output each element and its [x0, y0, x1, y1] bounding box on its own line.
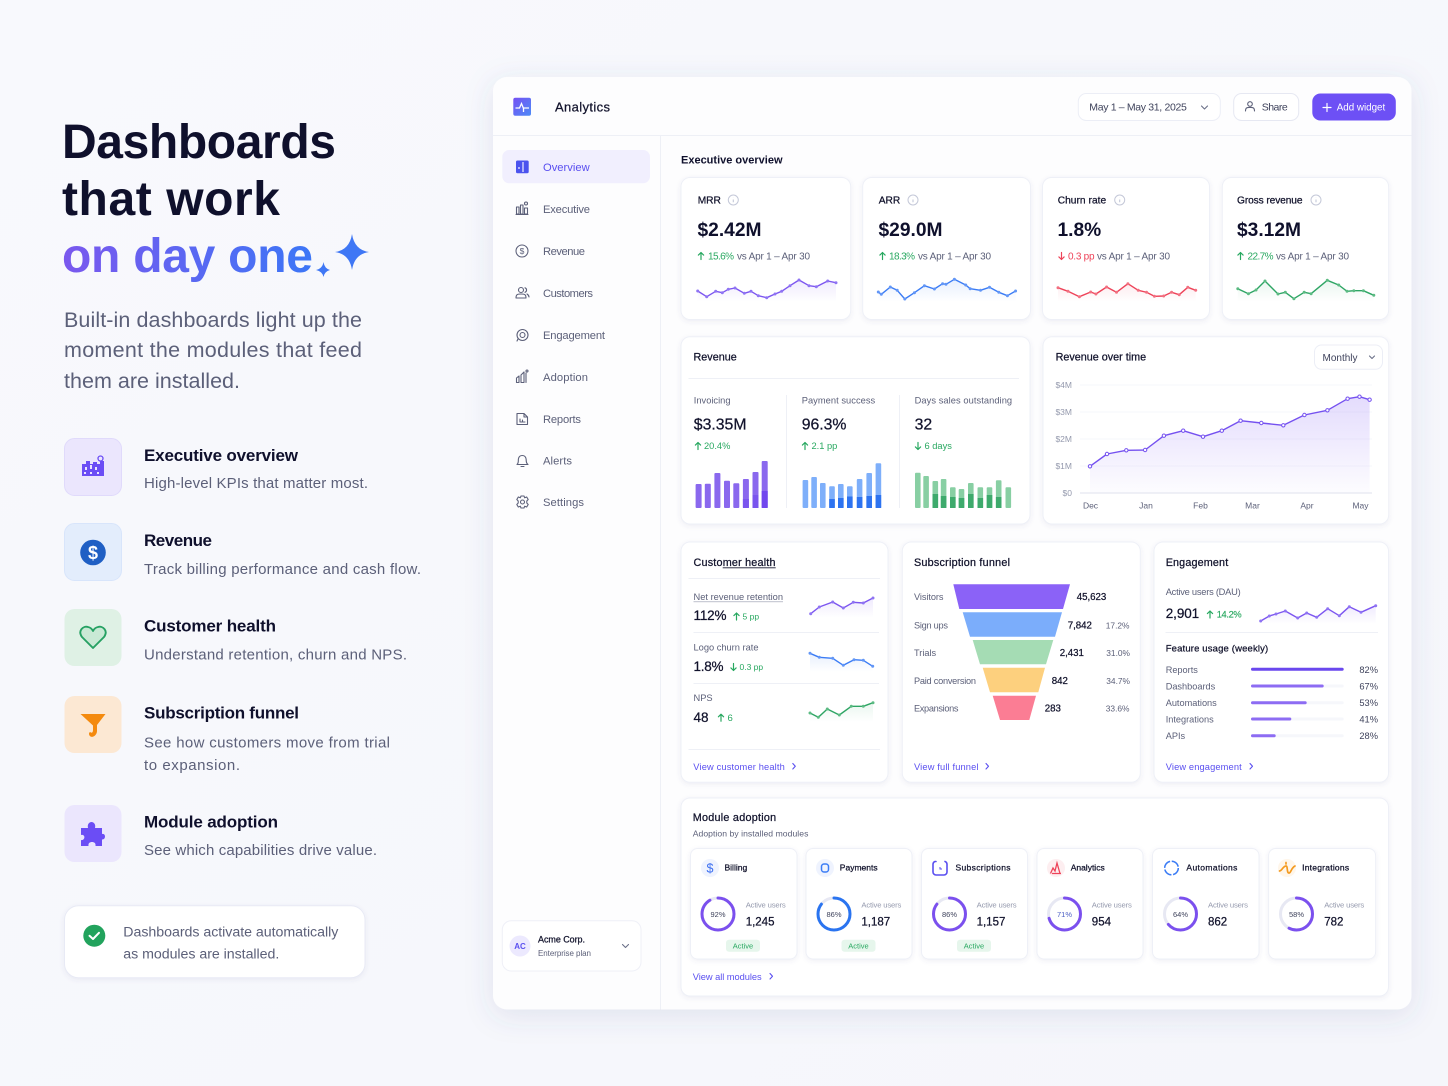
module: subscriptions: Active [964, 942, 984, 950]
metric: payment success: Payment success [802, 396, 876, 406]
account switcher: Acme Corp. [538, 934, 585, 944]
metric: invoicing: $3.35M [694, 416, 747, 433]
date range: May 1 – May 31, 2025 [1089, 102, 1187, 114]
feature usage bars: Integrations [1166, 714, 1214, 724]
KPI card: ARR: $29.0M [878, 220, 942, 241]
KPI card: churn rate: 1.8% [1058, 220, 1101, 241]
metric: payment success: 2.1 pp [812, 441, 837, 451]
funnel labels: Visitors [914, 592, 944, 602]
funnel conversion rates: 17.2% [1106, 620, 1130, 630]
title [62, 116, 336, 283]
link: View engagement [1166, 762, 1242, 772]
module: subscriptions: 86% [942, 910, 957, 919]
top bar [513, 94, 1396, 120]
description: to expansion. [144, 757, 240, 774]
panel: revenue [681, 337, 1030, 524]
module: billing: Billing [724, 863, 747, 873]
heading: Executive overview [144, 446, 299, 465]
link: View customer health [693, 762, 785, 772]
module: billing [690, 848, 797, 959]
description: See how customers move from trial [144, 734, 390, 752]
bar chart [803, 463, 881, 508]
module: integrations: 782 [1324, 917, 1343, 929]
module: subscriptions: Active users [977, 900, 1017, 910]
sparkline [1238, 280, 1374, 302]
nav: engagement [517, 330, 606, 342]
module: analytics [1037, 848, 1143, 959]
bar chart [915, 473, 1011, 508]
metric: NPS: 48 [694, 710, 709, 725]
metric: invoicing: Invoicing [694, 396, 731, 406]
metric: invoicing: 20.4% [704, 441, 730, 451]
feature usage bars: 82% [1359, 665, 1378, 675]
KPI card: MRR: 15.6% [708, 251, 734, 262]
panel: revenue over time: Revenue over time [1056, 352, 1146, 364]
metric: net revenue retention: Net revenue retention [694, 592, 783, 602]
link: View full funnel [914, 762, 978, 772]
share button: Share [1262, 102, 1288, 114]
module: billing: 1,245 [746, 917, 774, 929]
description: High-level KPIs that matter most. [144, 475, 368, 492]
funnel conversion rates: 34.7% [1106, 676, 1131, 686]
icon: check [83, 925, 105, 947]
metric: days sales outstanding: Days sales outstanding [915, 396, 1012, 406]
feature: revenue [64, 524, 421, 580]
sparkline [878, 279, 1016, 302]
icon: heart [64, 609, 122, 666]
panel: customer health [681, 542, 888, 782]
KPI card: gross revenue [1222, 178, 1389, 320]
callout text: as modules are installed. [123, 946, 279, 962]
metric: logo churn rate: 1.8% [694, 659, 724, 674]
area chart: May [1352, 500, 1369, 510]
funnel values: 842 [1052, 676, 1068, 687]
icon: executive overview [64, 438, 122, 496]
title: that work [62, 173, 280, 226]
metric: net revenue retention: 5 pp [742, 612, 759, 622]
area chart: $4M [1055, 380, 1072, 390]
account switcher: AC [514, 942, 526, 951]
module: automations: 64% [1173, 910, 1188, 919]
funnel values [1045, 592, 1106, 715]
KPI card: churn rate: 0.3 pp [1068, 251, 1095, 262]
nav: overview [502, 150, 650, 183]
bar chart [696, 461, 768, 508]
metric: days sales outstanding [915, 396, 1012, 508]
metric: active users: 14.2% [1217, 610, 1242, 620]
description: See which capabilities drive value. [144, 842, 377, 859]
feature usage bars: Dashboards [1166, 682, 1216, 692]
heading: Subscription funnel [144, 704, 299, 722]
module: payments: 86% [826, 910, 842, 919]
KPI card: churn rate: Churn rate [1058, 196, 1107, 206]
funnel values: 283 [1045, 704, 1061, 715]
account switcher [502, 921, 641, 971]
KPI card: gross revenue: vs Apr 1 – Apr 30 [1276, 251, 1349, 262]
callout [64, 906, 365, 978]
nav: customers: Customers [543, 288, 593, 300]
area chart: $3M [1055, 407, 1072, 417]
feature: customer health [64, 609, 407, 666]
funnel values: 45,623 [1077, 592, 1106, 603]
funnel labels [914, 592, 976, 714]
dropdown [1314, 345, 1382, 369]
area chart: $2M [1055, 434, 1072, 444]
area chart: Mar [1245, 500, 1260, 510]
subtitle [64, 308, 362, 393]
callout text: Dashboards activate automatically [123, 925, 339, 941]
account switcher: Enterprise plan [538, 949, 591, 958]
metric: logo churn rate [694, 642, 873, 674]
date range [1078, 94, 1220, 120]
panel: subscription funnel [902, 542, 1140, 782]
module: automations: 862 [1208, 917, 1227, 929]
metric: active users: 2,901 [1166, 606, 1199, 621]
metric: active users [1166, 587, 1376, 624]
sparkline [698, 280, 836, 302]
panel: module adoption [681, 798, 1388, 996]
KPI card: MRR: $2.42M [698, 220, 762, 241]
funnel labels: Sign ups [914, 620, 948, 630]
nav: settings [517, 496, 584, 509]
nav: settings: Settings [543, 497, 584, 509]
feature usage bars: 53% [1359, 698, 1378, 708]
funnel conversion rates [1106, 620, 1131, 714]
icon: revenue [64, 524, 122, 580]
dashboard window [493, 77, 1412, 1010]
module: payments: 1,187 [861, 917, 890, 929]
funnel labels: Trials [914, 648, 937, 658]
metric: payment success [802, 396, 881, 508]
module: subscriptions: 1,157 [977, 917, 1005, 929]
heading: Customer health [144, 616, 276, 636]
module: analytics: 71% [1057, 910, 1072, 919]
area chart [1055, 380, 1372, 510]
metric: days sales outstanding: 32 [915, 416, 932, 433]
metric: net revenue retention: 112% [694, 608, 726, 623]
feature usage bars: Reports [1166, 665, 1198, 675]
module: billing: 92% [710, 910, 726, 919]
metric: payment success: 96.3% [802, 416, 846, 433]
nav: alerts: Alerts [543, 456, 572, 468]
module: subscriptions [922, 848, 1028, 959]
feature: executive overview [64, 438, 368, 496]
feature usage bars: Automations [1166, 698, 1217, 708]
KPI card: MRR: vs Apr 1 – Apr 30 [737, 251, 810, 262]
KPI card: ARR: ARR [879, 196, 900, 206]
panel: subscription funnel: Subscription funnel [914, 557, 1010, 569]
nav: adoption [516, 370, 588, 384]
feature usage bars: 67% [1359, 682, 1378, 692]
panel: revenue over time [1043, 337, 1389, 524]
nav: executive [516, 202, 590, 216]
module: integrations: Integrations [1302, 863, 1349, 873]
metric: active users: Active users (DAU) [1166, 587, 1241, 597]
section heading: Executive overview [681, 154, 783, 166]
nav: overview: Overview [543, 162, 591, 174]
module: integrations: Active users [1324, 900, 1364, 910]
module: analytics: 954 [1092, 917, 1112, 929]
app name: Analytics [555, 100, 610, 115]
module: payments [806, 848, 912, 959]
module: integrations: 58% [1289, 910, 1304, 919]
module: automations: Active users [1208, 900, 1248, 910]
KPI card: ARR: 18.3% [889, 251, 915, 262]
module: automations [1152, 848, 1259, 959]
module: automations: Automations [1186, 863, 1237, 873]
link: View all modules [693, 972, 762, 982]
metric: NPS [694, 693, 873, 725]
area chart: $0 [1063, 488, 1072, 498]
funnel conversion rates: 33.6% [1106, 704, 1130, 714]
module: billing: Active users [746, 900, 786, 910]
nav: customers [516, 288, 593, 300]
KPI card: gross revenue: 22.7% [1248, 251, 1274, 262]
area chart: Jan [1139, 500, 1153, 510]
area chart: $1M [1055, 461, 1072, 471]
panel: engagement: Feature usage (weekly) [1166, 644, 1268, 654]
add widget button: Add widget [1337, 103, 1385, 114]
nav: revenue: $ [520, 246, 525, 256]
description: Track billing performance and cash flow. [144, 561, 421, 578]
title: Dashboards [62, 116, 336, 169]
feature usage bars: 41% [1359, 714, 1378, 724]
KPI card: gross revenue: Gross revenue [1237, 196, 1303, 206]
panel: module adoption: Adoption by installed modules [693, 828, 808, 838]
feature usage bars [1166, 665, 1378, 741]
funnel values: 2,431 [1060, 648, 1084, 659]
module: billing: $ [707, 862, 714, 876]
description: Understand retention, churn and NPS. [144, 646, 407, 663]
area chart: Apr [1300, 500, 1314, 510]
metric: days sales outstanding: 6 days [924, 441, 952, 451]
nav: engagement: Engagement [543, 330, 606, 342]
funnel labels: Paid conversion [914, 676, 976, 686]
icon: funnel [64, 696, 122, 753]
area chart: Dec [1083, 500, 1099, 510]
logo [513, 98, 531, 116]
KPI card: ARR [863, 178, 1030, 320]
subtitle: them are installed. [64, 369, 240, 393]
add widget button [1312, 94, 1396, 120]
panel: revenue: Revenue [694, 352, 737, 364]
KPI card: MRR: MRR [698, 196, 721, 206]
module: analytics: Analytics [1071, 863, 1105, 873]
nav: reports [517, 414, 581, 426]
metric: logo churn rate: Logo churn rate [694, 642, 758, 652]
panel: engagement: Engagement [1166, 557, 1228, 569]
metric: NPS: NPS [694, 693, 713, 703]
title: on day one [62, 230, 313, 283]
panel: module adoption: Module adoption [693, 812, 776, 824]
module: billing: Active [733, 942, 753, 950]
sparkline [1058, 284, 1196, 302]
panel: customer health: Customer health [694, 557, 776, 569]
module: integrations [1269, 848, 1376, 959]
icon: sparkles [316, 234, 369, 277]
KPI card: ARR: vs Apr 1 – Apr 30 [918, 251, 991, 262]
subtitle: Built-in dashboards light up the [64, 308, 362, 332]
nav: adoption: Adoption [543, 372, 588, 384]
icon: puzzle [64, 805, 122, 862]
funnel conversion rates: 31.0% [1106, 648, 1131, 658]
module: payments: Payments [840, 863, 878, 873]
KPI card: gross revenue: $3.12M [1237, 220, 1301, 241]
nav: revenue [516, 245, 585, 258]
KPI card: churn rate: vs Apr 1 – Apr 30 [1097, 251, 1170, 262]
heading: Module adoption [144, 812, 278, 832]
module: analytics: Active users [1092, 900, 1132, 910]
module: payments: Active [848, 942, 869, 950]
panel: engagement [1154, 542, 1388, 782]
module: payments: Active users [861, 900, 902, 910]
feature usage bars: 28% [1359, 731, 1378, 741]
dropdown: Monthly [1322, 353, 1358, 364]
feature: module adoption [64, 805, 377, 862]
nav: reports: Reports [543, 414, 581, 426]
KPI card: churn rate [1042, 178, 1210, 320]
heading: Revenue [144, 531, 212, 550]
share button [1234, 94, 1299, 120]
metric: invoicing [694, 396, 768, 508]
area chart: Feb [1193, 500, 1208, 510]
nav: revenue: Revenue [543, 246, 585, 258]
feature usage bars: APIs [1166, 731, 1186, 741]
sidebar [502, 150, 650, 971]
module: subscriptions: Subscriptions [956, 863, 1010, 873]
subtitle: moment the modules that feed [64, 338, 362, 362]
metric: net revenue retention [694, 592, 873, 623]
funnel labels: Expansions [914, 704, 959, 714]
icon: revenue: $ [88, 543, 98, 563]
feature: subscription funnel [64, 696, 390, 774]
nav: alerts [517, 456, 572, 468]
KPI card: MRR [681, 178, 851, 320]
metric: NPS: 6 [728, 713, 733, 724]
nav: executive: Executive [543, 204, 590, 216]
funnel values: 7,842 [1068, 620, 1092, 631]
funnel chart [953, 584, 1070, 720]
metric: logo churn rate: 0.3 pp [740, 662, 763, 672]
